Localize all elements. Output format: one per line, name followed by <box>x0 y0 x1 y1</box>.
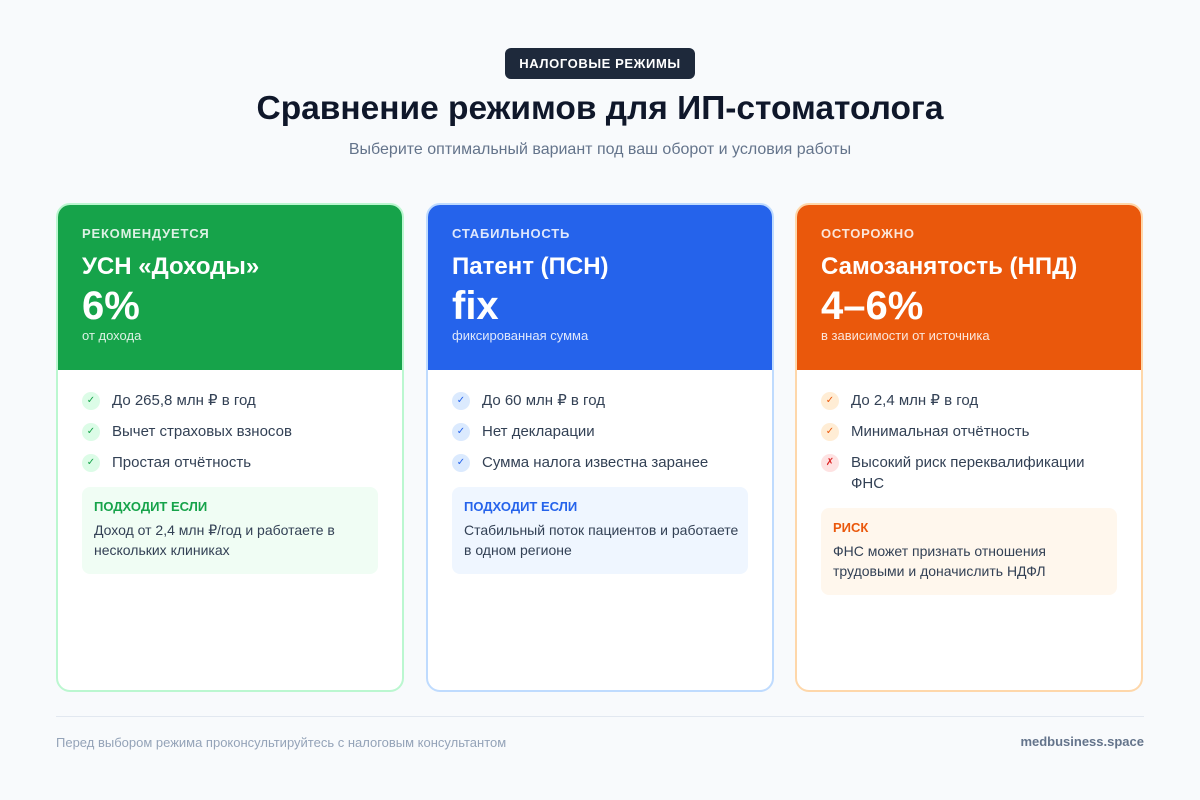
header: NPD: в зависимости от источника <box>821 328 990 343</box>
header: NPD: Самозанятость (НПД) <box>821 253 1077 280</box>
list: NPD: Высокий риск переквалификации ФНС <box>851 454 1085 492</box>
badge <box>505 48 695 79</box>
list: USN: ✓ <box>87 457 95 468</box>
header: patent: Патент (ПСН) <box>452 253 609 280</box>
list: USN: ✓ <box>87 426 95 437</box>
list: USN: ПОДХОДИТ ЕСЛИ <box>94 499 207 514</box>
list: patent: Стабильный поток пациентов и работаете <box>464 522 738 538</box>
list: patent: в одном регионе <box>464 542 572 558</box>
list: patent: До 60 млн ₽ в год <box>482 392 605 409</box>
list: USN: Простая отчётность <box>112 454 251 471</box>
subtitle: Выберите оптимальный вариант под ваш оборот и условия работы <box>349 141 851 158</box>
list: patent: ПОДХОДИТ ЕСЛИ <box>464 499 577 514</box>
list: NPD: ✓ <box>826 426 834 437</box>
panel: NPD <box>795 203 1143 692</box>
header: USN: УСН «Доходы» <box>82 253 259 280</box>
header: USN: РЕКОМЕНДУЕТСЯ <box>82 226 210 241</box>
list: NPD: ✗ <box>826 457 834 468</box>
footer note: Перед выбором режима проконсультируйтесь с налоговым консультантом <box>56 735 506 750</box>
list: patent: ✓ <box>457 395 465 406</box>
list: patent <box>452 392 748 574</box>
list: NPD: ✓ <box>826 395 834 406</box>
header: patent: СТАБИЛЬНОСТЬ <box>452 226 570 241</box>
panel: USN <box>56 203 404 692</box>
panel: patent <box>426 203 774 692</box>
list: NPD: Минимальная отчётность <box>851 423 1029 440</box>
footer brand: medbusiness.space <box>1020 734 1144 749</box>
list: patent: Нет декларации <box>482 423 595 440</box>
list: USN: Вычет страховых взносов <box>112 423 292 440</box>
list: patent: ✓ <box>457 457 465 468</box>
list: USN <box>82 392 378 574</box>
header: patent: fix <box>452 284 499 328</box>
list: patent: Сумма налога известна заранее <box>482 454 708 471</box>
header: USN: от дохода <box>82 328 141 343</box>
header: NPD: 4–6% <box>821 284 923 328</box>
badge: НАЛОГОВЫЕ РЕЖИМЫ <box>519 56 681 71</box>
list: USN: ✓ <box>87 395 95 406</box>
list: NPD <box>821 392 1117 595</box>
header: USN <box>58 205 402 370</box>
list: NPD: ФНС может признать отношения трудовыми и доначислить НДФЛ <box>833 543 1046 579</box>
list: patent: ✓ <box>457 426 465 437</box>
header: patent <box>428 205 772 370</box>
list: NPD: РИСК <box>833 520 868 535</box>
list: USN: Доход от 2,4 млн ₽/год и работаете в нескольких клиниках <box>94 522 335 558</box>
header: patent: фиксированная сумма <box>452 328 588 343</box>
header: USN: 6% <box>82 284 140 328</box>
list: NPD: До 2,4 млн ₽ в год <box>851 392 978 409</box>
title: Сравнение режимов для ИП-стоматолога <box>256 90 944 127</box>
list: USN: До 265,8 млн ₽ в год <box>112 392 256 409</box>
header: NPD: ОСТОРОЖНО <box>821 226 915 241</box>
header: NPD <box>797 205 1141 370</box>
